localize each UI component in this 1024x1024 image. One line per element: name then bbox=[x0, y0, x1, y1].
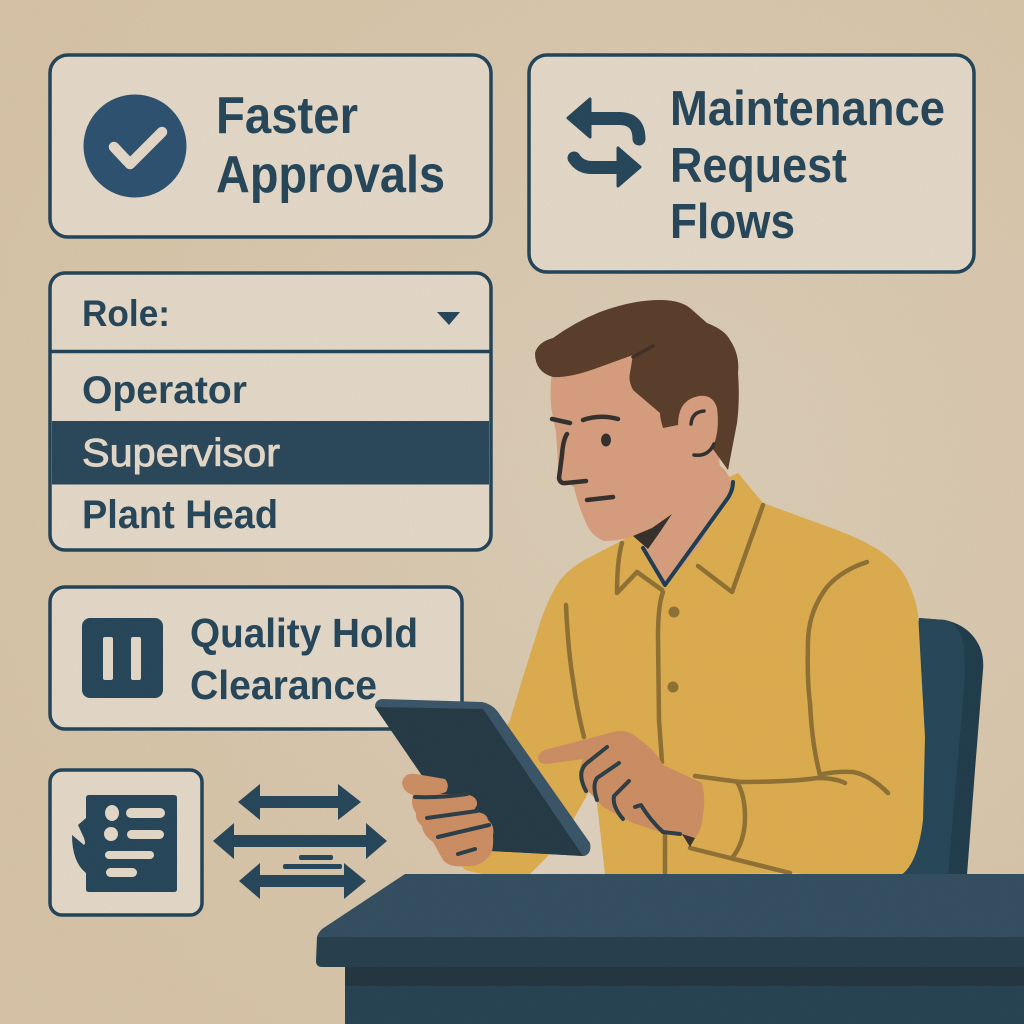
shirt buttons bbox=[668, 606, 680, 692]
hair bbox=[535, 300, 739, 470]
shirt details bbox=[566, 505, 888, 873]
option: plant head: Plant Head bbox=[82, 493, 278, 537]
desk edge bbox=[316, 937, 1024, 967]
desk bbox=[316, 874, 1024, 1024]
background gap between arms bbox=[530, 790, 605, 874]
left hand bbox=[402, 774, 493, 866]
eye bbox=[601, 434, 611, 446]
person bbox=[375, 300, 925, 879]
heading: maintenance request flows bbox=[670, 82, 945, 249]
icon: checklist bbox=[72, 795, 177, 892]
dropdown label: Role: bbox=[82, 293, 170, 334]
panel: checklist icon card bbox=[50, 770, 202, 915]
option: supervisor selected bbox=[52, 421, 489, 484]
icon: double-headed arrows bbox=[213, 784, 387, 899]
icon: swap arrows bbox=[568, 99, 640, 186]
desk leg front bbox=[345, 960, 1024, 1024]
heading: faster approvals: Faster bbox=[216, 87, 358, 145]
hair highlight bbox=[633, 346, 653, 357]
panel: faster approvals bbox=[50, 55, 491, 237]
panel: maintenance request flows bbox=[529, 55, 974, 272]
face features bbox=[552, 417, 618, 500]
ear bbox=[678, 396, 718, 456]
desk top bbox=[317, 874, 1024, 937]
heading: maintenance request flows: Flows bbox=[670, 195, 795, 249]
icon: dropdown caret bbox=[437, 312, 460, 325]
heading: faster approvals: Approvals bbox=[216, 146, 445, 204]
neck bbox=[600, 440, 733, 586]
heading: maintenance request flows: Request bbox=[670, 139, 847, 193]
tablet bbox=[375, 699, 590, 856]
collar shadow bbox=[633, 514, 672, 549]
heading: quality hold clearance bbox=[190, 610, 418, 708]
heading: maintenance request flows: Maintenance bbox=[670, 82, 945, 136]
icon: pause bbox=[82, 618, 163, 698]
panel: quality hold clearance bbox=[50, 587, 462, 729]
panel: role dropdown bbox=[50, 273, 491, 550]
heading: quality hold clearance: Clearance bbox=[190, 662, 377, 708]
heading: faster approvals bbox=[216, 87, 445, 204]
option: supervisor selected: Supervisor bbox=[82, 432, 280, 475]
chair bbox=[900, 618, 983, 875]
heading: quality hold clearance: Quality Hold bbox=[190, 610, 418, 656]
right hand bbox=[538, 731, 704, 847]
option: operator: Operator bbox=[82, 369, 247, 412]
icon: check circle bbox=[84, 94, 186, 198]
shirt bbox=[440, 473, 925, 879]
collar line bbox=[643, 482, 733, 585]
head bbox=[550, 340, 720, 541]
